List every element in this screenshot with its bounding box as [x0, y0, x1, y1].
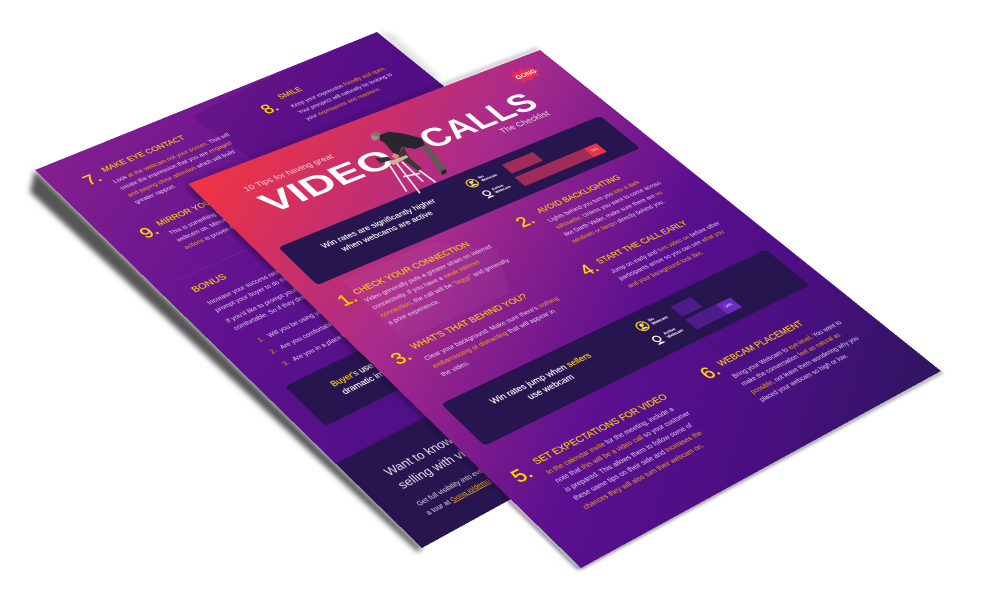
value tag 2: 34% [724, 303, 734, 309]
tip 7 number: 7. [78, 170, 106, 188]
tip 4 text: participants arrive so you can see what you [617, 229, 726, 282]
tip 7 text: Look at the webcam not your screen. This will [112, 132, 232, 184]
dark panel 1 [278, 116, 640, 285]
icon: no webcam 2 [635, 321, 650, 331]
value tag 2 [716, 297, 742, 314]
tip 6 text: Bring your Webcam to eye-level. You want to [731, 320, 844, 380]
legend active webcam: Webcam [494, 185, 512, 194]
bonus list [256, 336, 291, 367]
legend active webcam 2: Active [662, 327, 677, 336]
tip 8 heading: SMILE [275, 86, 304, 100]
divider [177, 142, 487, 280]
tip 2 text: windows or lamps directly behind you. [570, 199, 667, 244]
footer heading: selling with video? [394, 435, 492, 491]
tip 2 text: Lights behind you turn you into a dark [546, 180, 642, 224]
the checklist: The Checklist [497, 110, 552, 135]
tip 4 number: 4. [574, 259, 603, 279]
bonus list: 2. [268, 348, 279, 355]
bonus heading: BONUS [189, 272, 229, 294]
panel 1 text: when webcams are active [339, 209, 435, 253]
front sheet [188, 50, 941, 568]
back sheet [36, 32, 510, 548]
bonus list text: Are you in a place to turn it on? [291, 318, 378, 363]
dark panel 2 [441, 250, 810, 446]
bonus list: 3. [281, 360, 291, 367]
tip 5 text: these same tips on their side and increases the [572, 430, 705, 502]
logo [510, 66, 540, 83]
tip 4 heading: START THE CALL EARLY [594, 219, 689, 265]
tip 6 text: make the conversation feel as natural as [740, 332, 843, 388]
bonus list: 1. [256, 336, 267, 344]
title: video: VIDEO [250, 144, 404, 219]
tip 8 text: Your prospect will naturally be looking to [297, 72, 395, 115]
tip 5 text: note that this will be a video call so your customer [554, 410, 693, 485]
tip 2 heading: AVOID BACKLIGHTING [534, 174, 623, 215]
panel 2 text: use webcam [524, 372, 577, 401]
legend active webcam: Active [491, 184, 505, 191]
tip 6 text: placed your webcam so high or low. [758, 353, 850, 403]
tip 1 text: Video generally puts a greater strain on internet [363, 244, 494, 304]
tip 2 text: silhouette. Unless you want to come across [554, 181, 663, 230]
legend no webcam 2: No [647, 317, 656, 323]
footer text: a tour at Gong.io/demo [424, 478, 492, 517]
panel 1 text: Win rates are significantly higher [319, 197, 438, 250]
icon: no webcam [466, 179, 479, 188]
icon: active webcam [482, 190, 495, 198]
tip 5 number: 5. [506, 462, 538, 486]
tip 7 text: and paying close attention which will build [126, 149, 237, 198]
tip 4 text: and your background look like. [626, 250, 705, 289]
tip 9 text: This is something you can do even with your [168, 183, 286, 236]
back callout text: dramatic impact on win rates [339, 341, 444, 396]
bar: active webcam [515, 149, 594, 186]
back callout text: Buyer's use of webcam has a [328, 332, 435, 388]
tip 4 text: Jump on early and turn video on before other [609, 221, 722, 275]
bonus text 2: comfortable. So if they decline, it stays easy. [232, 273, 353, 332]
tip 8 text: Keep your expression friendly and open. [289, 66, 388, 109]
value tag: 56% [590, 148, 600, 153]
tip 2 text: like Darth Vader, make sure there are no [562, 190, 665, 237]
bar 2: no webcam [670, 297, 702, 317]
legend active webcam 2: Webcam [666, 328, 685, 339]
footer band [335, 283, 775, 548]
tip 5 heading: SET EXPECTATIONS FOR VIDEO [530, 392, 670, 466]
tip 5 text: chances they will also turn their webcam on. [581, 442, 706, 511]
tip 1 text: a poor experience. [386, 299, 443, 326]
legend no webcam: No [477, 175, 485, 180]
bonus list text: Are you comfortable on video? [278, 308, 364, 351]
bar 2: active webcam [685, 304, 728, 329]
tip 9 text: actions is proven to build rapport. [183, 208, 273, 251]
tip 5 text [544, 406, 706, 511]
tip 3 number: 3. [386, 346, 416, 368]
tip 2 number: 2. [511, 212, 539, 230]
tip 7 heading: MAKE EYE CONTACT [99, 134, 187, 173]
panel 2 text: Win rates jump when sellers [487, 351, 594, 406]
tip 1 number: 1. [332, 289, 362, 309]
footer heading: Want to know how your team is [381, 392, 537, 478]
bonus text 2: If you'd like to prompt your buyer, try asking if they are [224, 255, 369, 324]
back callout box [285, 233, 642, 426]
tip 8 number: 8. [256, 99, 283, 117]
tip 7 text [112, 132, 237, 205]
tip 5 text: In the calendar invite for the meeting, include a [544, 406, 676, 476]
legend no webcam 2: Webcam [651, 315, 669, 326]
tip 7 text: greater rapport. [133, 184, 178, 205]
logo: GONG [513, 68, 539, 81]
tip 1 text: connection, the call will be "laggy" and generally [378, 258, 511, 319]
tip 9 text: webcam on. Mirroring your buyer's tone and [175, 190, 292, 243]
bonus list text [266, 294, 378, 363]
tip 9 heading: MIRROR YOUR BUYER [154, 183, 249, 228]
tip 1 text: connectivity. If you have a weak internet [370, 260, 482, 311]
tip 2 text [546, 180, 667, 244]
tip 6 text: possible, not leave them wondering why you [749, 335, 861, 395]
tip 9 number: 9. [135, 222, 163, 241]
subtitle: 10 Tips for having great [241, 153, 336, 193]
tip 3 text: the video. [439, 360, 472, 378]
bonus text: prompt your buyer to do the same on the call. [213, 255, 336, 314]
tip 3 heading: WHAT'S THAT BEHIND YOU? [408, 292, 530, 351]
tip 1 text [363, 244, 511, 326]
value tag [583, 143, 607, 157]
bonus list text: Will you be using your webcam? [266, 294, 356, 339]
tip 6 text [731, 320, 861, 403]
bar: no webcam [502, 152, 543, 174]
tip 7 text: create the impression that you are engaged [119, 141, 234, 191]
background facet [188, 50, 941, 568]
icon: active webcam 2 [652, 336, 666, 346]
footer text: Get full visibility into every video call. Take [415, 442, 532, 508]
tip 6 heading: WEBCAM PLACEMENT [715, 319, 806, 368]
tip 5 text: is prepared. This allows them to follow some of [563, 422, 695, 493]
title: calls: CALLS [409, 87, 546, 154]
tip 8 text: your expressions and reactions. [304, 86, 383, 122]
background facet [192, 32, 441, 160]
tip 3 text: embarrassing or distracting that will appear in [431, 309, 558, 370]
tip 3 text: Clear your background. Make sure there's nothing [423, 296, 561, 362]
tip 6 number: 6. [695, 361, 725, 383]
bonus text: Increase your success rate by asking your buyer [206, 244, 336, 306]
tip 1 heading: CHECK YOUR CONNECTION [350, 240, 472, 296]
legend no webcam: Webcam [480, 173, 499, 182]
